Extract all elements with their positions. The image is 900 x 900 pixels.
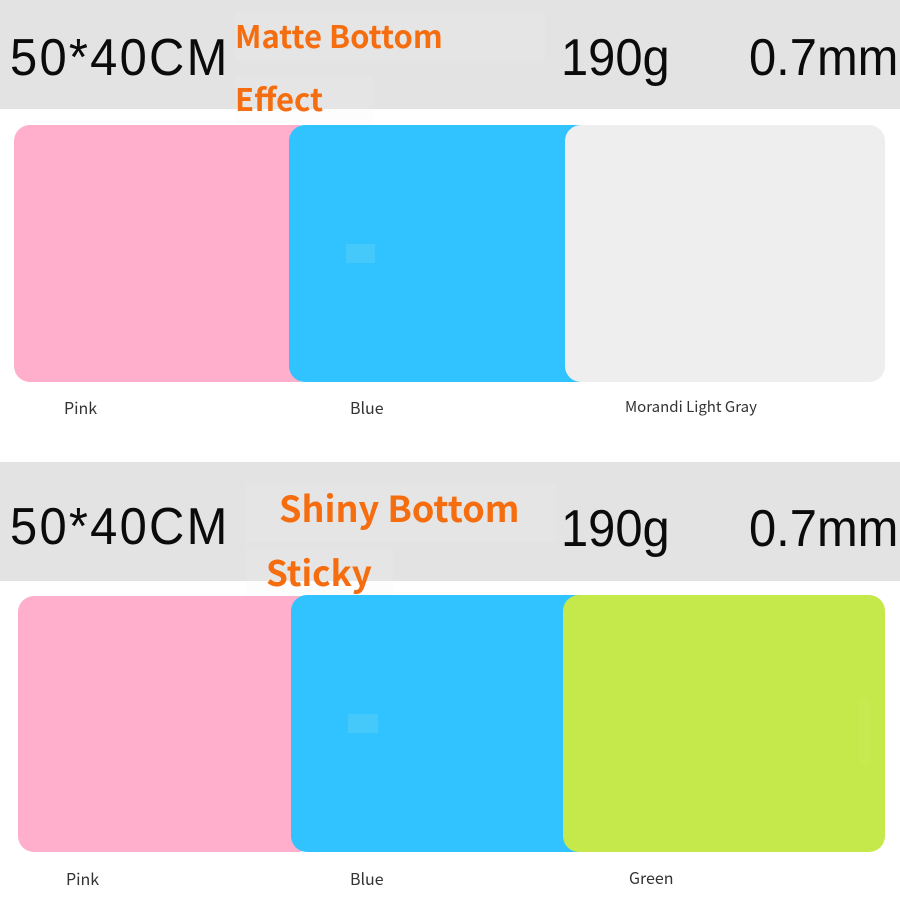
blue swatch mark, top <box>346 244 375 263</box>
bottom thickness spec: 0.7mm <box>749 500 898 558</box>
pink swatch, top <box>14 125 314 382</box>
blue swatch mark, bottom <box>348 714 378 733</box>
bottom weight spec: 190g <box>561 500 670 558</box>
bottom heading line two: Sticky <box>266 546 372 597</box>
label: gray, top: Morandi Light Gray <box>625 396 757 417</box>
blue swatch, bottom <box>291 595 607 852</box>
bottom heading backdrop lower <box>246 548 393 598</box>
label: pink, top: Pink <box>64 395 97 419</box>
gray swatch, top <box>565 125 885 382</box>
bottom heading line one: Shiny Bottom <box>279 481 519 533</box>
bottom size spec: 50*40CM <box>10 498 230 556</box>
top heading backdrop <box>235 13 545 61</box>
blue swatch, top <box>289 125 601 382</box>
top heading backdrop lower <box>235 76 373 124</box>
top heading line one: Matte Bottom <box>235 12 443 57</box>
top thickness spec: 0.7mm <box>749 29 898 87</box>
label: green, bottom: Green <box>629 865 674 889</box>
top spec band <box>0 0 900 109</box>
label: blue, top: Blue <box>350 395 384 419</box>
top heading line two: Effect <box>235 75 323 120</box>
bottom heading backdrop <box>246 484 556 542</box>
label: blue, bottom: Blue <box>350 866 384 890</box>
pink swatch, bottom <box>18 596 314 852</box>
label: pink, bottom: Pink <box>66 866 99 890</box>
top size spec: 50*40CM <box>10 29 230 87</box>
green swatch watermark <box>859 697 871 765</box>
top weight spec: 190g <box>561 29 670 87</box>
green swatch, bottom <box>563 595 885 852</box>
bottom spec band <box>0 462 900 581</box>
